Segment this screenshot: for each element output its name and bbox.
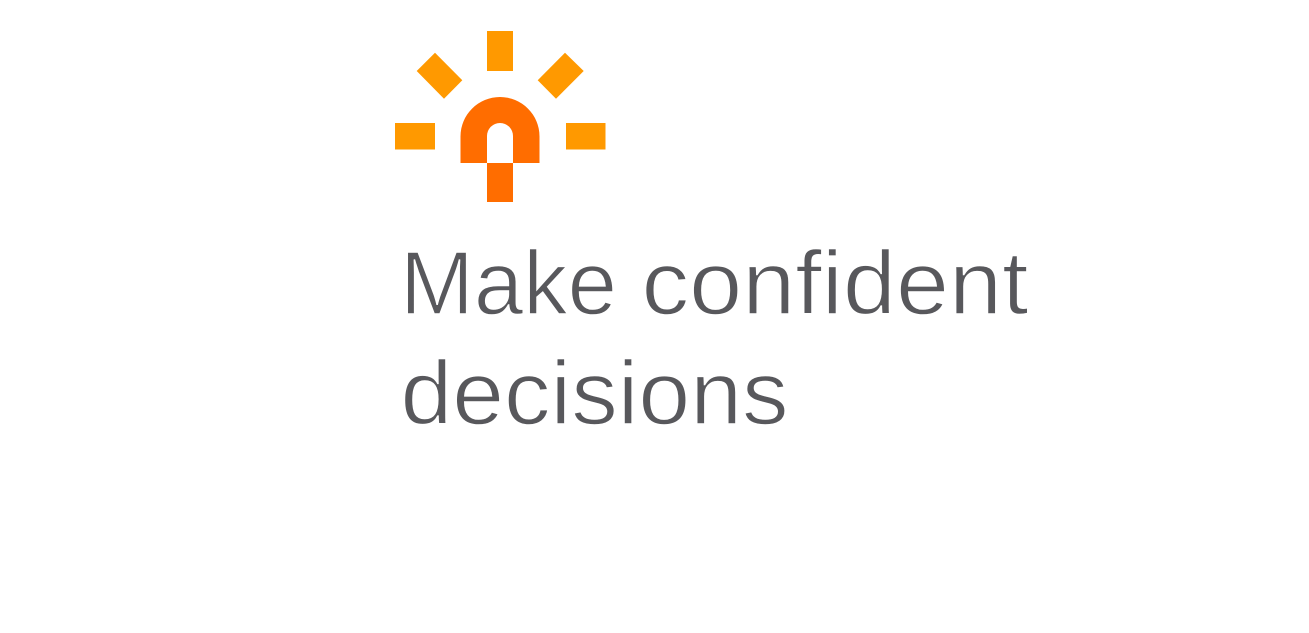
- icon: lightbulb logo with rays: [395, 31, 606, 202]
- icon: orange arch and stem: [460, 97, 540, 202]
- icon: upper right ray: [538, 53, 584, 99]
- icon: left ray: [395, 123, 435, 150]
- icon: right ray: [566, 123, 606, 150]
- heading: [400, 234, 1028, 444]
- icon: upper left ray: [417, 53, 462, 99]
- heading line 1: [400, 234, 1028, 334]
- heading line 1: confident: [642, 234, 1028, 334]
- icon: top ray: [487, 31, 513, 71]
- heading line 2: decisions: [400, 344, 788, 444]
- heading line 1: Make: [400, 234, 617, 334]
